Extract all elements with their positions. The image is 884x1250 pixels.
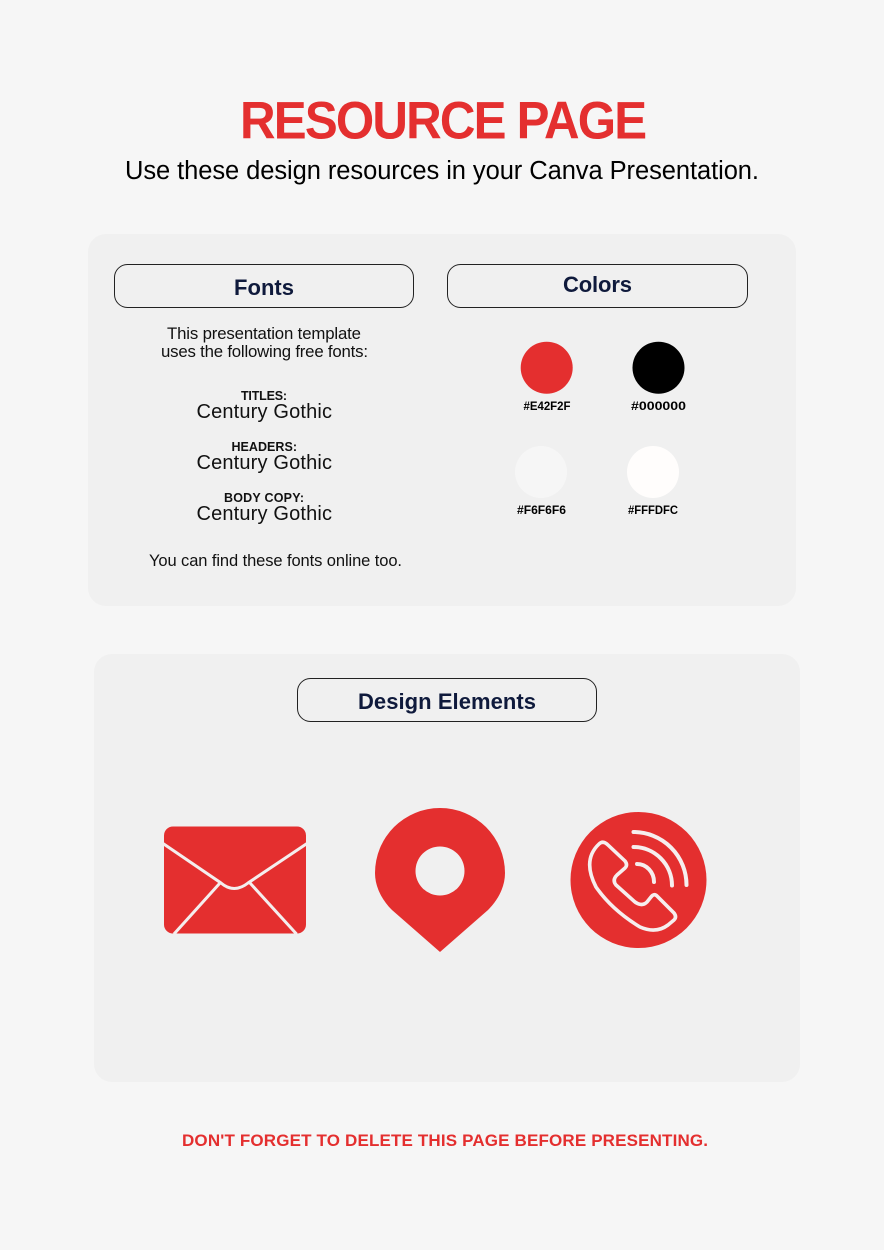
fonts heading [114, 264, 414, 308]
font entry: body copy [196, 491, 332, 525]
font entry: body copy: BODY COPY: [224, 491, 304, 505]
swatch: light grey [515, 446, 567, 517]
swatch: red [521, 342, 573, 413]
icon: envelope [163, 826, 307, 934]
subtitle: Use these design resources in your Canva Presentation. [125, 157, 759, 185]
fonts heading: Fonts [234, 275, 294, 300]
swatch: off white [627, 446, 679, 517]
font entry: body copy: Century Gothic [196, 503, 332, 525]
swatch: red: #E42F2F [524, 401, 570, 413]
colors heading [448, 264, 748, 308]
footer reminder: DON'T FORGET TO DELETE THIS PAGE BEFORE PRESENTING. [182, 1131, 708, 1150]
icon: map pin [375, 808, 505, 952]
font entry: titles: Century Gothic [196, 401, 332, 423]
fonts note: You can find these fonts online too. [149, 552, 402, 570]
font entry: titles [196, 389, 332, 423]
font entry: titles: TITLES: [241, 389, 287, 403]
fonts intro text: uses the following free fonts: [161, 342, 368, 361]
swatch: off white: #FFFDFC [628, 505, 678, 517]
swatch: light grey: #F6F6F6 [517, 505, 566, 517]
icon: phone [570, 812, 706, 948]
panel: fonts and colors [88, 234, 796, 606]
design elements heading [298, 678, 596, 722]
panel: design elements [94, 654, 800, 1082]
fonts intro text [161, 324, 368, 361]
title: RESOURCE PAGE [240, 91, 647, 150]
font entry: headers: HEADERS: [232, 440, 297, 454]
colors heading: Colors [563, 272, 632, 297]
swatch: black [631, 342, 686, 413]
font entry: headers [196, 440, 332, 474]
fonts intro text: This presentation template [167, 324, 361, 343]
design elements heading: Design Elements [358, 689, 536, 714]
font entry: headers: Century Gothic [196, 452, 332, 474]
swatch: black: #000000 [631, 401, 686, 413]
